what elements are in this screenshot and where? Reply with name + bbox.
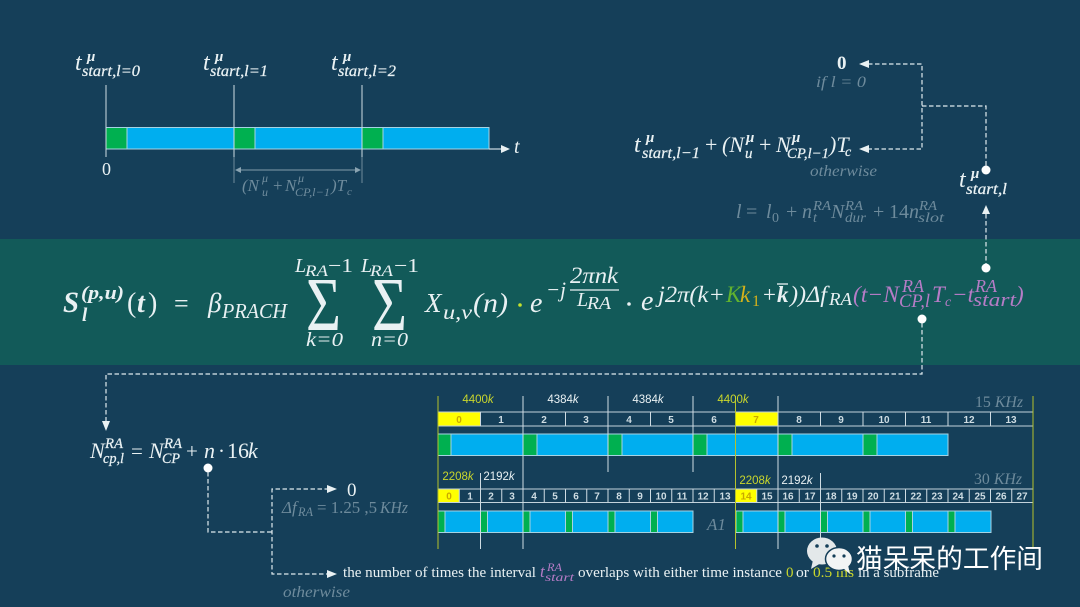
- second exponential: j2π(k+: [655, 282, 725, 307]
- grid: 30 kHz: 20: [867, 492, 879, 502]
- grid: 30 kHz: 24: [952, 492, 964, 502]
- watermark text: 猫呆呆的工作间: [856, 544, 1043, 574]
- label: otherwise case description: [343, 560, 939, 584]
- purple time term: T: [932, 282, 947, 307]
- labels: 15 kHz sample counts: [462, 394, 750, 406]
- label: l formula: l: [736, 201, 742, 223]
- grid: 15 kHz: 3: [583, 415, 589, 426]
- grid: 30 kHz: 23: [931, 492, 943, 502]
- label: otherwise formula: μ: [791, 130, 800, 146]
- grid: 30 kHz: 6: [573, 492, 579, 502]
- summation over n: Σ: [372, 263, 407, 347]
- exponential with fraction: e: [530, 288, 542, 319]
- label: l formula: RA: [918, 199, 937, 214]
- labels: 15 kHz sample counts: 4400k: [717, 394, 750, 406]
- second exponential: 1: [752, 293, 760, 310]
- grid: 15 kHz: 7: [753, 415, 759, 426]
- left side: =: [174, 289, 189, 318]
- grid: 30 kHz: 3: [509, 492, 515, 502]
- label: N cp,l formula: ·: [218, 439, 225, 463]
- grid: 15 kHz: 5: [668, 415, 674, 426]
- summation over k: k=0: [306, 329, 343, 351]
- panel: subcarrier spacing slot diagram: [438, 394, 1033, 549]
- left side: (p,u): [81, 283, 124, 304]
- label: delta f RA condition: KHz: [379, 498, 408, 517]
- second exponential: K: [725, 282, 743, 307]
- label: otherwise case description: 0.5 ms: [813, 565, 854, 581]
- grid: 30 kHz: 9: [637, 492, 643, 502]
- grid: 30 kHz: 13: [719, 492, 731, 502]
- main equation: [63, 255, 1024, 351]
- purple time term: RA: [901, 276, 925, 296]
- label: symbol duration: )T: [330, 176, 348, 195]
- labels: 30 kHz sample counts: 2192k: [781, 475, 814, 487]
- grid: 30 kHz: 0: [446, 492, 452, 502]
- label: otherwise formula: )T: [827, 132, 850, 157]
- labels: 30 kHz sample counts: [442, 471, 814, 487]
- label: otherwise formula: +: [705, 132, 717, 157]
- label: otherwise case description: t: [540, 562, 546, 581]
- label: l formula: =: [746, 201, 757, 223]
- label: N cp,l formula: N: [89, 438, 106, 463]
- purple time term: c: [945, 295, 952, 310]
- icon: chat bubbles: [807, 538, 852, 574]
- summation over n: RA: [369, 263, 393, 280]
- X u,v (n): u,v: [443, 300, 473, 324]
- label: t start l: μ: [970, 166, 979, 182]
- label: otherwise case description: the number of times the interval: [343, 565, 536, 581]
- beta PRACH: PRACH: [221, 299, 289, 323]
- label: t start l=2: μ: [342, 49, 351, 65]
- grid: 30 kHz: 19: [846, 492, 858, 502]
- label: l formula: l: [766, 201, 772, 223]
- summation over k: RA: [304, 263, 328, 280]
- purple time term: start: [973, 290, 1017, 311]
- label: zero: 0: [102, 159, 111, 179]
- label: symbol duration: μ: [261, 171, 268, 185]
- purple time term: (t−N: [853, 282, 901, 307]
- grid: 30 kHz: 15: [761, 492, 773, 502]
- label: t start l: t: [959, 167, 967, 193]
- label: N cp,l formula: +: [186, 439, 198, 463]
- grid: 15 kHz: 10: [878, 415, 890, 426]
- grid: 15 kHz: 12: [963, 415, 975, 426]
- label: otherwise formula: N: [775, 132, 792, 157]
- label: N cp,l formula: RA: [163, 436, 183, 452]
- equation band: [0, 239, 1080, 365]
- purple time term: RA: [974, 276, 998, 296]
- beta PRACH: β: [207, 288, 222, 318]
- bar: 15 kHz symbols: [438, 434, 948, 456]
- summation over k: Σ: [306, 263, 341, 347]
- label: otherwise formula: μ: [645, 130, 654, 146]
- label: l formula: RA: [844, 199, 863, 214]
- labels: 30 kHz sample counts: 2208k: [442, 471, 475, 483]
- grid: 30 kHz: 21: [889, 492, 901, 502]
- grid: 15 kHz: [438, 412, 1033, 426]
- grid: 15 kHz: 9: [838, 415, 844, 426]
- label: otherwise: otherwise: [810, 163, 877, 180]
- label: otherwise: otherwise: [283, 584, 350, 601]
- label: t start l=2: t: [331, 50, 339, 76]
- summation over k: [294, 255, 353, 351]
- exponential with fraction: 2πnk: [570, 263, 619, 288]
- watermark: [807, 538, 1043, 574]
- label: otherwise formula: CP,l−1: [787, 146, 829, 162]
- grid: 30 kHz: 27: [1016, 492, 1028, 502]
- second exponential: ))Δf: [788, 282, 831, 307]
- label: t start l=1: t: [203, 50, 211, 76]
- dot: green multiply: [518, 303, 522, 307]
- grid: 30 kHz: 17: [804, 492, 816, 502]
- grid: 30 kHz: 8: [616, 492, 622, 502]
- label: t start l: start,l: [966, 181, 1008, 198]
- grid: 30 kHz: 11: [677, 492, 688, 502]
- summation over k: −1: [328, 255, 353, 277]
- label: t start l=2: start,l=2: [338, 63, 396, 80]
- purple time term: CP,l: [899, 291, 930, 312]
- grid: 15 kHz: 6: [711, 415, 717, 426]
- label: delta f RA condition: = 1.25 ,5: [317, 498, 377, 517]
- dot: multiply: [627, 302, 631, 306]
- label: 15 KHz: 15 KHz: [975, 394, 1024, 411]
- purple time term: [853, 276, 1024, 312]
- label: t start l=1: μ: [214, 49, 223, 65]
- second exponential: e: [641, 286, 653, 317]
- label: delta f RA condition: [281, 498, 408, 519]
- grid: 15 kHz: 1: [498, 415, 504, 426]
- label: otherwise case description: overlaps with either time instance: [578, 565, 782, 581]
- grid: 30 kHz: [438, 489, 1033, 502]
- grid: 30 kHz: 16: [782, 492, 794, 502]
- labels: 15 kHz sample counts: 4400k: [462, 394, 495, 406]
- label: t start l=0: μ: [86, 49, 95, 65]
- grid: 30 kHz: 12: [697, 492, 709, 502]
- label: t start l=0: start,l=0: [82, 63, 140, 80]
- dimension arrow: [234, 157, 362, 183]
- grid: 15 kHz: 2: [541, 415, 547, 426]
- purple time term: −t: [952, 282, 975, 307]
- grid: 30 kHz: 26: [995, 492, 1007, 502]
- label: symbol duration: c: [347, 186, 352, 198]
- arrow: from equation to t start: [982, 205, 990, 272]
- label: otherwise formula: t: [634, 132, 642, 158]
- labels: 30 kHz sample counts: 2192k: [483, 471, 516, 483]
- label: t start l=0: t: [75, 50, 83, 76]
- label: N cp,l formula: k: [248, 438, 259, 463]
- label: delta f RA condition: RA: [297, 504, 313, 519]
- label: otherwise case description: RA: [546, 560, 563, 574]
- label: N cp,l formula: =: [131, 439, 143, 463]
- grid: 30 kHz: 1: [467, 492, 473, 502]
- label: otherwise formula: u: [745, 146, 752, 162]
- label: t start l=1: [203, 49, 268, 80]
- label: l formula: t: [813, 211, 818, 226]
- purple time term: ): [1014, 282, 1024, 307]
- label: l formula: +: [786, 201, 797, 223]
- grid: 30 kHz: 18: [825, 492, 837, 502]
- label: t start l=2: [331, 49, 396, 80]
- arrows: dashed branch to cases: [859, 60, 990, 174]
- grid: 15 kHz: 13: [1005, 415, 1017, 426]
- second exponential: k: [740, 282, 751, 307]
- summation over n: L: [360, 255, 372, 277]
- second exponential: k: [777, 282, 789, 307]
- bar: 30 kHz symbols second half: [736, 511, 991, 532]
- label: l formula: dur: [845, 211, 867, 226]
- X u,v (n): X: [424, 288, 443, 318]
- label: l formula: 0: [772, 211, 779, 226]
- labels: 30 kHz sample counts: 2208k: [739, 475, 772, 487]
- label: symbol duration: CP,l−1: [295, 185, 330, 199]
- label: symbol duration: μ: [297, 171, 304, 185]
- label: symbol duration: N: [284, 176, 298, 195]
- symbol bar: [106, 128, 489, 149]
- label: l formula: n: [802, 201, 812, 223]
- labels: 15 kHz sample counts: 4384k: [547, 394, 580, 406]
- bar: 30 kHz symbols first half: [438, 511, 693, 532]
- second exponential: +: [763, 282, 776, 307]
- summation over n: n=0: [371, 329, 408, 351]
- arrow: from equation to N cp,l: [102, 314, 926, 431]
- label: symbol duration: +: [273, 176, 283, 195]
- label: otherwise case description: in a subframe: [858, 565, 939, 581]
- grid: 15 kHz: 4: [626, 415, 632, 426]
- label: zero case: 0: [837, 53, 846, 74]
- left side: S: [63, 286, 79, 319]
- label: l formula: N: [830, 201, 846, 223]
- label: if l = 0: if l = 0: [816, 74, 866, 91]
- label: t start l: [959, 166, 1008, 198]
- grid: 30 kHz: 25: [974, 492, 986, 502]
- panel: time-domain symbol timeline: [75, 49, 520, 199]
- label: zero case: 0: [347, 480, 356, 501]
- label: symbol duration: u: [262, 185, 268, 199]
- label: t start l=0: [75, 49, 140, 80]
- grid: 15 kHz: 11: [921, 415, 932, 426]
- grid: 30 kHz: 2: [488, 492, 494, 502]
- label: l formula: slot: [918, 211, 945, 226]
- label: symbol duration: (N: [242, 176, 261, 195]
- label: l formula: +: [873, 201, 884, 223]
- label: otherwise formula: c: [845, 145, 852, 160]
- label: t start l=1: start,l=1: [210, 63, 268, 80]
- grid: 30 kHz: 14: [740, 492, 752, 502]
- grid: 30 kHz: 5: [552, 492, 558, 502]
- label: otherwise case description: start: [545, 570, 575, 584]
- exponential with fraction: L: [576, 289, 588, 311]
- arrows: dashed branch to n cases: [204, 464, 337, 578]
- left side: (: [127, 288, 136, 319]
- label: otherwise formula: (N: [722, 132, 745, 157]
- label: otherwise case description: or: [796, 565, 809, 581]
- panel: N cp,l definition: [89, 436, 939, 601]
- labels: 15 kHz sample counts: 4384k: [632, 394, 665, 406]
- label: N cp,l formula: N: [148, 438, 165, 463]
- exponential with fraction: [530, 263, 619, 319]
- label: otherwise formula: μ: [745, 130, 754, 146]
- arrow: time axis: [489, 145, 510, 153]
- label: symbol duration: [242, 171, 352, 199]
- exponential with fraction: RA: [586, 293, 612, 313]
- grid: 30 kHz: 22: [910, 492, 922, 502]
- label: t axis: t: [514, 136, 520, 158]
- label: otherwise case description: 0: [786, 565, 794, 581]
- exponential with fraction: −j: [546, 277, 566, 302]
- label: otherwise formula: [634, 130, 852, 162]
- label: delta f RA condition: Δf: [281, 498, 299, 517]
- grid: 30 kHz: 10: [655, 492, 667, 502]
- summation over n: [360, 255, 419, 351]
- grid: 30 kHz: 7: [594, 492, 600, 502]
- second exponential: [641, 282, 853, 317]
- label: N cp,l formula: [89, 436, 259, 467]
- X u,v (n): [424, 288, 508, 324]
- left side: l: [82, 305, 88, 326]
- grid: 30 kHz: 4: [531, 492, 537, 502]
- label: A1: A1: [706, 515, 726, 534]
- label: l formula: 14n: [889, 201, 919, 223]
- label: l formula: [736, 199, 945, 226]
- label: otherwise formula: +: [759, 132, 771, 157]
- label: N cp,l formula: cp,l: [103, 451, 124, 467]
- grid: 15 kHz: 0: [456, 415, 462, 426]
- left side: [63, 283, 189, 326]
- left side: t: [137, 288, 146, 319]
- label: otherwise formula: start,l−1: [642, 145, 700, 162]
- label: 30 KHz: 30 KHz: [974, 471, 1023, 488]
- beta PRACH: [207, 288, 289, 323]
- grid: 15 kHz: 8: [796, 415, 802, 426]
- X u,v (n): (n): [473, 288, 508, 318]
- second exponential: RA: [828, 289, 853, 309]
- label: N cp,l formula: RA: [104, 436, 124, 452]
- summation over k: L: [294, 255, 306, 277]
- left side: ): [148, 288, 157, 319]
- summation over n: −1: [394, 255, 419, 277]
- panel: t start definition: [634, 53, 1008, 272]
- label: N cp,l formula: CP: [162, 451, 180, 467]
- label: N cp,l formula: 16: [227, 438, 249, 463]
- label: l formula: RA: [812, 199, 831, 214]
- label: N cp,l formula: n: [204, 438, 215, 463]
